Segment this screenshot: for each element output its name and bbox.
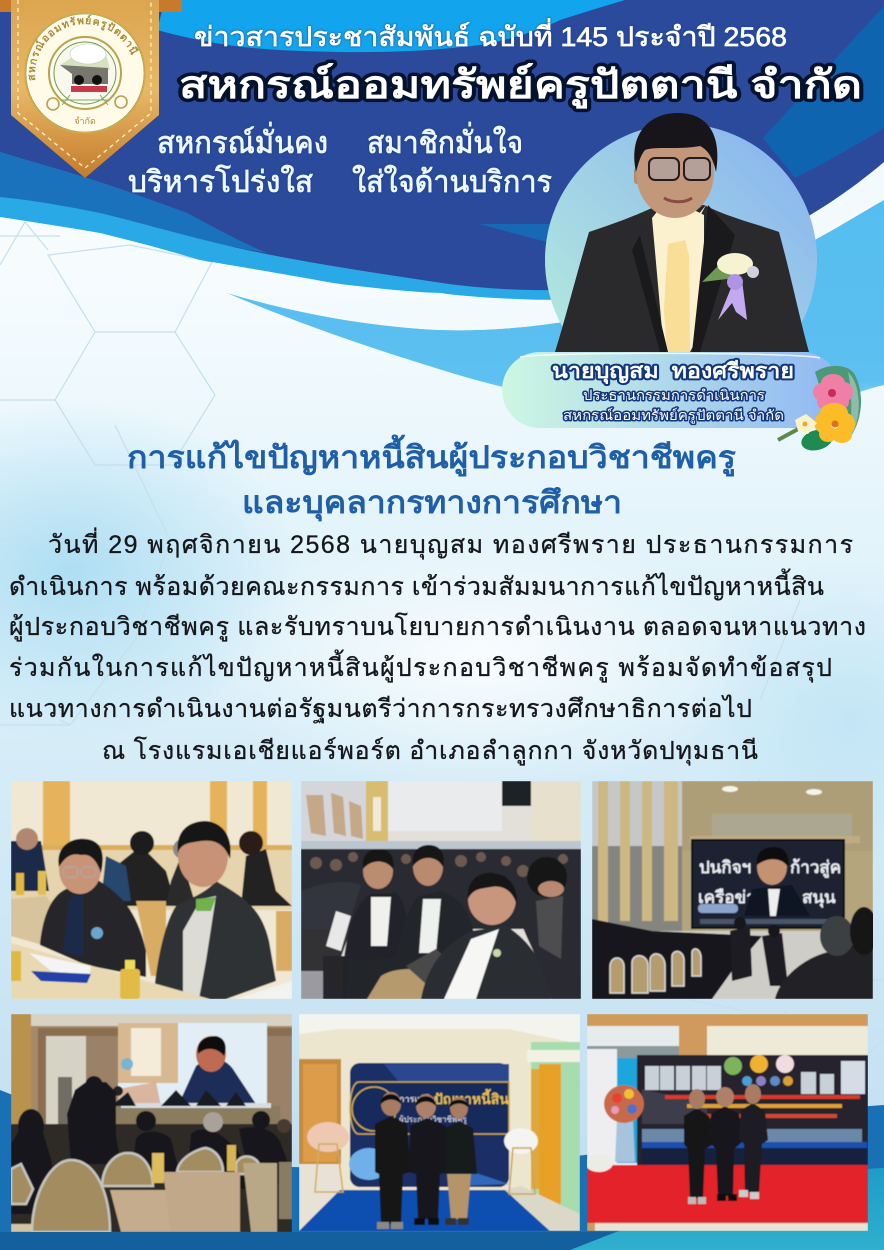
top-right blue streak <box>763 6 884 178</box>
person left <box>375 1092 411 1229</box>
person right <box>739 1084 768 1199</box>
screen text: ปนกิจฯ <box>699 858 751 877</box>
hexagon background pattern <box>0 222 884 1060</box>
article body text: วันที่ 29 พฤศจิกายน 2568 นายบุญสม ทองศรีพราย ประธานกรรมการ <box>48 527 853 560</box>
header title: สหกรณ์ออมทรัพย์ครูปัตตานี จำกัด <box>179 62 862 109</box>
flower: yellow hibiscus <box>814 403 855 443</box>
attendee D <box>517 886 581 999</box>
article heading <box>127 434 736 522</box>
bright blue top band <box>157 0 625 52</box>
person middle <box>709 1087 742 1201</box>
attendee A <box>343 893 408 999</box>
chairman position: ประธานกรรมการดำเนินการ <box>583 387 766 403</box>
article body text: ร่วมกันในการแก้ไขปัญหาหนี้สินผู้ประกอบวิชาชีพครู พร้อมจัดทำข้อสรุป <box>9 649 832 683</box>
slogan: สมาชิกมั่นใจ <box>367 122 523 160</box>
slogan <box>128 122 552 199</box>
photo 3: speaker on large screen in auditorium <box>592 781 873 999</box>
screen text: เครือข่าย <box>698 887 766 907</box>
header light-blue band <box>0 0 700 301</box>
slogan: สหกรณ์มั่นคง <box>157 122 328 160</box>
portrait of chairman <box>555 113 809 352</box>
icon: tropical flowers <box>778 366 861 454</box>
photo 4: meeting room with presenter screen <box>11 1014 292 1232</box>
foreground table <box>11 943 210 999</box>
photo 1: two seated members at meeting table <box>11 781 292 999</box>
photo 6: three members before event backdrop on red carpet <box>587 1014 868 1231</box>
slogan: ใส่ใจด้านบริการ <box>352 165 552 199</box>
mid-blue wedge behind portrait <box>479 224 552 243</box>
photo 5: three members before navy backdrop: การแก้ไข <box>399 1094 436 1104</box>
header navy shape <box>0 0 884 290</box>
article body text <box>9 527 866 766</box>
photo 5: three members before navy backdrop <box>299 1014 580 1231</box>
chairman position: สหกรณ์ออมทรัพย์ครูปัตตานี จำกัด <box>563 407 784 424</box>
logo seal <box>24 12 146 134</box>
foreground chairs and tables <box>11 1148 259 1232</box>
logo badge <box>0 0 182 178</box>
article body text: ณ โรงแรมเอเชียแอร์พอร์ต อำเภอลำลูกกา จังหวัดปทุมธานี <box>102 736 758 766</box>
backdrop speakers row <box>645 1061 865 1094</box>
seated man left <box>40 879 146 977</box>
flower stand left <box>307 1122 349 1192</box>
screen text <box>698 858 841 908</box>
person middle <box>409 1094 449 1225</box>
chairman position <box>563 387 784 424</box>
audience <box>11 1076 292 1214</box>
white swoosh band <box>300 158 884 330</box>
screen text: สนุน <box>802 888 836 908</box>
article heading: และบุคลากรทางการศึกษา <box>242 485 622 522</box>
corsage <box>702 253 759 320</box>
attendee C <box>421 926 551 999</box>
logo seal: สหกรณ์ออมทรัพย์ครูปัตตานี <box>28 14 139 81</box>
backdrop logos <box>724 1055 794 1086</box>
seated man right <box>155 881 276 999</box>
photo 2: crowd of seminar attendees <box>301 781 581 999</box>
lower light-blue swoosh <box>227 200 884 425</box>
photo 5: three members before navy backdrop: ผู้ประกอบวิชาชีพครู <box>399 1115 468 1125</box>
person left <box>684 1089 714 1204</box>
header eyebrow text: ข่าวสารประชาสัมพันธ์ ฉบับที่ 145 ประจำปี 2568 <box>194 18 787 52</box>
article body text: แนวทางการดำเนินงานต่อรัฐมนตรีว่าการกระทรวงศึกษาธิการต่อไป <box>9 694 752 723</box>
attendee B <box>391 891 476 999</box>
background colour blotches <box>0 400 884 880</box>
article body text: ผู้ประกอบวิชาชีพครู และรับทราบนโยบายการดำเนินงาน ตลอดจนหาแนวทาง <box>9 612 866 642</box>
mid-blue lower wedge <box>0 152 267 253</box>
flower bouquet <box>585 1085 644 1172</box>
lower background waves <box>0 1090 884 1250</box>
screen text: ก้าวสู่ค <box>790 858 841 879</box>
flower: small white <box>795 414 817 434</box>
person right <box>445 1097 477 1225</box>
flower: pink hibiscus <box>813 374 853 410</box>
slogan: บริหารโปร่งใส <box>128 164 313 199</box>
name plate <box>502 352 840 428</box>
portrait circle <box>545 124 817 396</box>
flower stand right <box>504 1128 538 1194</box>
photo 5: three members before navy backdrop: ปัญหาหนี้สิน <box>434 1088 509 1108</box>
chairman name: นายบุญสม ทองศรีพราย <box>552 359 794 385</box>
article heading: การแก้ไขปัญหาหนี้สินผู้ประกอบวิชาชีพครู <box>127 434 736 477</box>
article body text: ดำเนินการ พร้อมด้วยคณะกรรมการ เข้าร่วมสัมมนาการแก้ไขปัญหาหนี้สิน <box>9 568 824 601</box>
logo seal: จำกัด <box>74 116 96 126</box>
